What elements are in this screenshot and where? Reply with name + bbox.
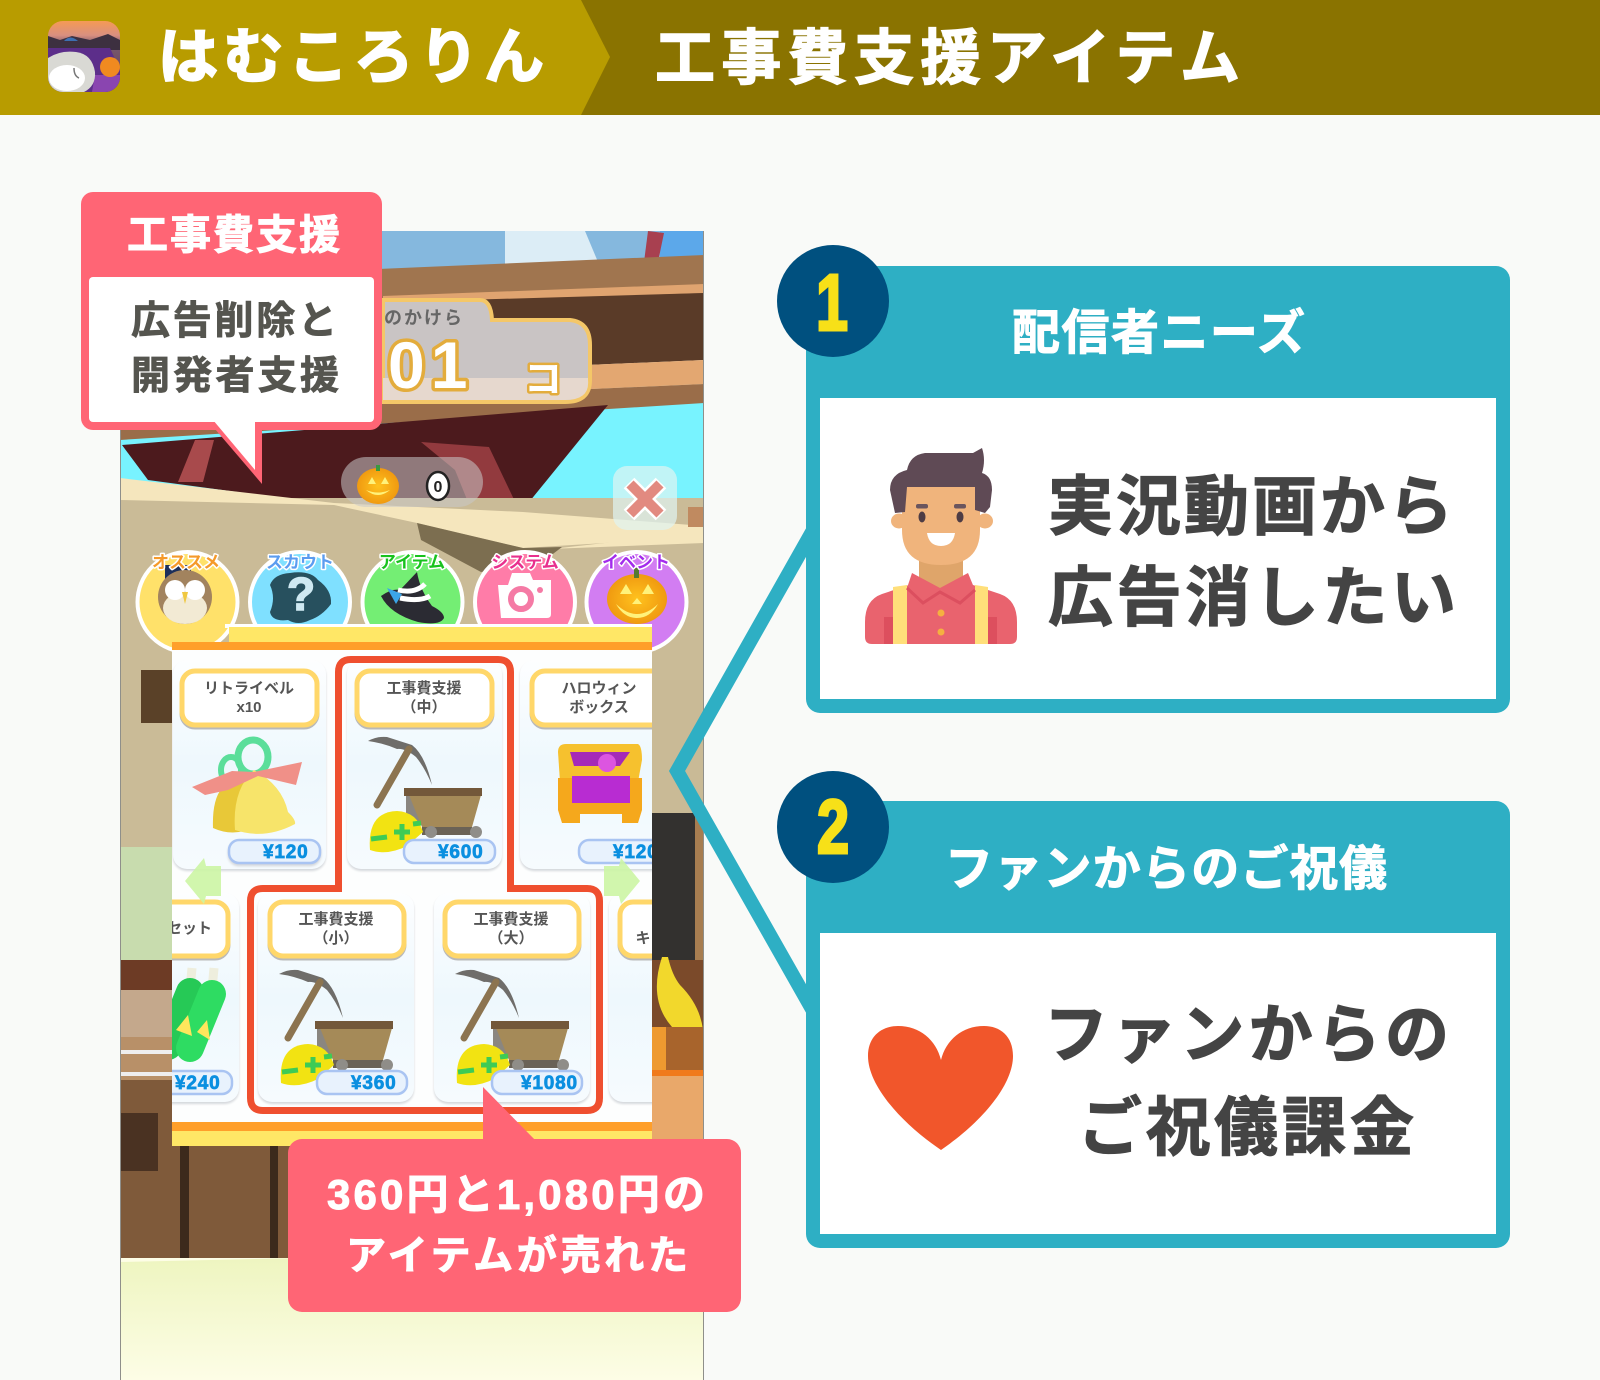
- callout heading: 工事費支援: [127, 212, 340, 258]
- card: potion set: [172, 900, 240, 1105]
- number badge 1: [777, 245, 889, 357]
- panel 2 body line 1: ファンからの: [1044, 999, 1449, 1071]
- callout text line 2: アイテムが売れた: [346, 1234, 688, 1278]
- panel 1 body line 2: 広告消したい: [1048, 561, 1456, 634]
- icon: person: [865, 448, 1017, 644]
- tab: system: システム: [491, 553, 559, 572]
- card: support medium: 工事費支援: [386, 679, 462, 697]
- tab: item: アイテム: [379, 553, 445, 572]
- card: next item: キ: [635, 930, 651, 947]
- panel: streamer needs: [777, 245, 1510, 713]
- card: support large: ¥1080: [521, 1073, 578, 1094]
- tab: osusume: オススメ: [152, 553, 220, 572]
- scene: sky and beams: [120, 231, 704, 445]
- tab: osusume: [138, 552, 238, 652]
- card: potion set: セット: [167, 920, 212, 937]
- card: retry bell: [173, 660, 326, 869]
- tab: scout: [248, 550, 352, 624]
- number badge 2: [777, 771, 889, 883]
- icon: app icon: [48, 21, 120, 92]
- callout body line 2: 開発者支援: [131, 355, 339, 398]
- card: retry bell: リトライベル: [204, 680, 294, 697]
- card: support small: 工事費支援: [298, 910, 374, 928]
- callout text line 1: 360円と1,080円の: [327, 1171, 705, 1218]
- card: support medium: [347, 660, 502, 869]
- arrow: scroll left: [185, 858, 221, 904]
- fragment counter: コ: [524, 359, 562, 401]
- heading: game name: はむころりん: [158, 24, 544, 91]
- panel 1 heading: 配信者ニーズ: [1012, 307, 1305, 360]
- menu panel: [172, 624, 652, 1146]
- tab: scout: スカウト: [266, 553, 334, 572]
- tab: event: イベント: [602, 553, 670, 572]
- close button: [613, 466, 677, 530]
- arrow: scroll right: [604, 858, 640, 904]
- selection outline: [250, 660, 600, 1110]
- card: next item: [608, 900, 652, 1105]
- callout body line 1: 広告削除と: [131, 300, 337, 343]
- card: halloween box: [519, 668, 652, 872]
- callout: construction support: [81, 192, 382, 484]
- card: support small: （小）: [313, 930, 359, 947]
- card: retry bell: x10: [236, 699, 262, 716]
- card: support medium: （中）: [401, 699, 447, 716]
- panel: fan tips: [777, 771, 1510, 1248]
- card: support medium: ¥600: [438, 842, 483, 863]
- scene: left lower strip: [121, 847, 290, 1258]
- connector arrow: [677, 532, 812, 1009]
- tab: item: [360, 550, 464, 624]
- number badge 1: 1: [816, 258, 848, 347]
- heading: page title: 工事費支援アイテム: [655, 25, 1240, 92]
- card: support large: 工事費支援: [473, 910, 549, 928]
- card: halloween box: ボックス: [569, 699, 629, 716]
- tab: event: [586, 552, 686, 652]
- pumpkin counter: [341, 457, 483, 507]
- callout: item sold: [288, 1087, 741, 1312]
- icon: heart: [868, 1026, 1013, 1150]
- scene: cyan sky under beam: [121, 403, 703, 498]
- item cards: [100, 660, 720, 1102]
- scene: floor: [121, 1258, 703, 1354]
- number badge 2: 2: [817, 785, 849, 870]
- scene: right lower strip: [652, 813, 703, 1139]
- card: retry bell: ¥120: [263, 842, 308, 863]
- tab: scout: ?: [287, 568, 315, 620]
- pumpkin counter: 0: [434, 479, 443, 496]
- header bar: [0, 0, 1600, 115]
- menu tabs: [138, 552, 686, 652]
- card: potion set: ¥240: [175, 1073, 220, 1094]
- tab: system: [473, 550, 577, 624]
- scene: sandy ground: [120, 478, 704, 860]
- fragment counter: 01: [388, 328, 473, 402]
- fragment counter: のかけら: [384, 308, 462, 328]
- game screenshot: [100, 231, 720, 1380]
- panel 2 body line 2: ご祝儀課金: [1078, 1092, 1414, 1164]
- scene: dark underside: [122, 405, 608, 498]
- card: support small: [258, 893, 414, 1102]
- card: support large: [434, 893, 590, 1102]
- card: support small: ¥360: [351, 1073, 396, 1094]
- panel 2 heading: ファンからのご祝儀: [945, 843, 1387, 896]
- card: support large: （大）: [488, 929, 534, 947]
- panel 1 body line 1: 実況動画から: [1048, 470, 1453, 543]
- card: halloween box: ¥120: [613, 842, 658, 863]
- card: halloween box: ハロウィン: [561, 680, 637, 697]
- fragment counter: [383, 300, 590, 402]
